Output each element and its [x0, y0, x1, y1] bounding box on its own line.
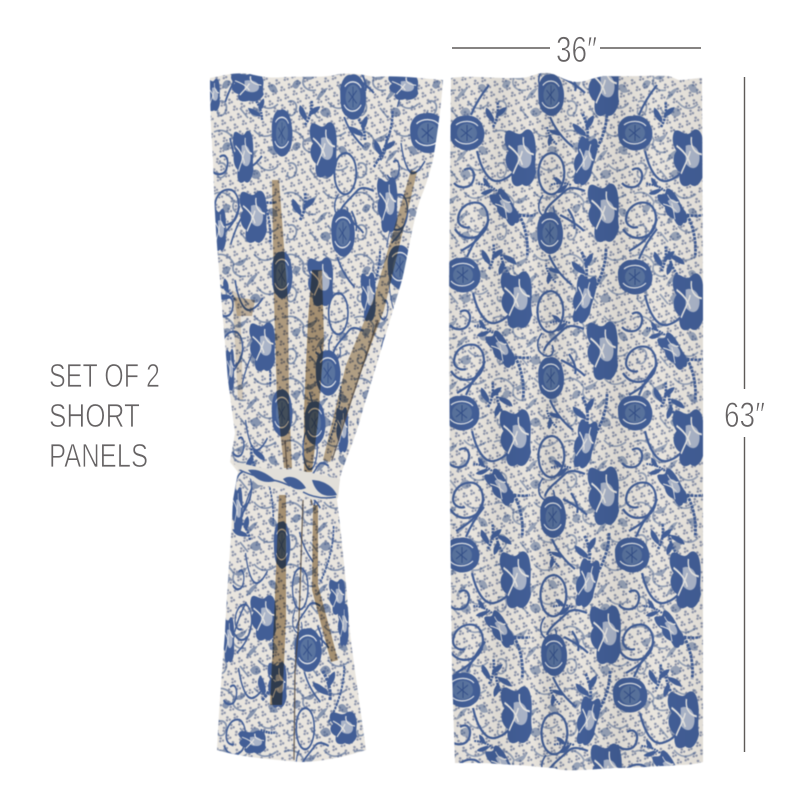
dark fold lines	[285, 320, 378, 760]
label: set of 2 short panels: SHORT	[49, 397, 140, 434]
repeating floral motif column three	[613, 85, 704, 800]
repeating floral motif column two	[536, 72, 622, 770]
label: set of 2 short panels	[49, 357, 160, 474]
curtain tie-back	[232, 461, 340, 500]
right flat curtain panel	[448, 72, 704, 771]
flowers on left curtain	[206, 72, 446, 753]
tan fold shadows	[232, 170, 417, 705]
repeating floral motif column one	[445, 85, 536, 795]
height dimension: 63 inches: 63″	[724, 396, 765, 435]
soft vertical fold shading	[445, 70, 707, 775]
left tied curtain panel	[205, 70, 450, 773]
label: set of 2 short panels: PANELS	[49, 437, 148, 474]
width dimension: 36 inches: 36″	[556, 29, 597, 70]
label: set of 2 short panels: SET OF 2	[49, 357, 160, 394]
